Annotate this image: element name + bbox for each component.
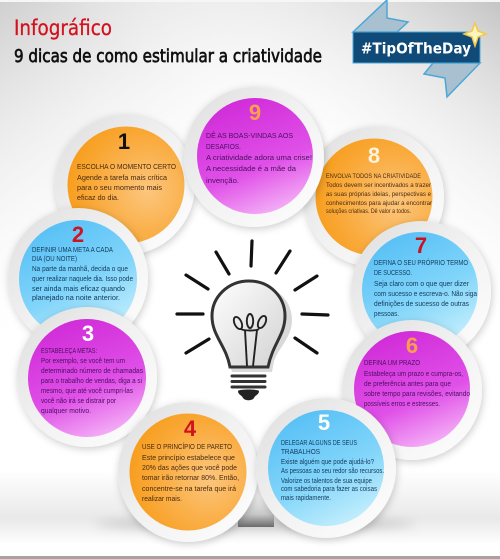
text: tip 6 <box>364 358 470 408</box>
number 8: 8 <box>368 143 380 168</box>
text: tip 2: DEFINIR UMA META A CADA <box>32 245 114 254</box>
text: tip 9: A necessidade é a mãe da <box>206 164 297 173</box>
text: tip 2: ser ainda mais eficaz quando <box>32 284 125 293</box>
text: tip 6: DEFINA UM PRAZO <box>364 358 420 367</box>
number 1: 1 <box>118 129 130 154</box>
panel: tip 9 <box>184 87 324 227</box>
text: tip 5: DELEGAR ALGUNS DE SEUS <box>281 440 357 447</box>
text: tip 9: A criatividade adora uma crise! <box>206 153 312 162</box>
text: tip 7: definições de sucesso de outras <box>374 299 469 308</box>
text: tip 8: conhecimentos para ajudar a encontrar <box>326 200 433 207</box>
text: tip 6: Estabeleça um prazo e cumpra-os, <box>364 369 463 378</box>
text: tip 4: Este princípio estabelece que <box>142 453 235 462</box>
text: tip 2: Na parte da manhã, decida o que <box>32 264 128 273</box>
text: tip 2: DIA (OU NOITE) <box>32 254 77 263</box>
text: tip 5: Valorize os talentos de sua equipe <box>281 478 372 485</box>
text: tip 2: planejado na noite anterior. <box>32 293 120 302</box>
subtitle: 9 dicas de como estimular a criatividade <box>14 46 322 67</box>
number 3: 3 <box>82 321 94 346</box>
text: tip 5: Existe alguém que pode ajudá-lo? <box>281 459 374 466</box>
text: tip 7: com sucesso e escreva-o. Não siga <box>374 289 478 298</box>
text: tip 7: Seja claro com o que quer dizer <box>374 279 469 288</box>
text: tip 6: de preferência antes para que <box>364 379 451 388</box>
icon: sparkle star <box>464 23 486 46</box>
text: tip 9 <box>206 131 312 185</box>
text: tip 3: para o trabalho de vendas, diga a si <box>41 376 142 385</box>
text: tip 3 <box>41 346 143 415</box>
text: tip 9: DESAFIOS. <box>206 142 241 151</box>
text: tip 3: qualquer motivo. <box>41 406 91 415</box>
text: tip 2 <box>32 245 133 302</box>
text: tip 4: realizar mais. <box>142 494 182 503</box>
text: tip 9: DÊ AS BOAS-VINDAS AOS <box>206 131 293 140</box>
text: tip 3: ESTABELEÇA METAS: <box>41 346 97 355</box>
text: tip 1: eficaz do dia. <box>77 193 119 202</box>
panel: tip 1 <box>55 115 195 255</box>
text: tip 4: 20% das ações que você pode <box>142 463 237 472</box>
text: tip 8: Todos devem ser incentivados a trazer <box>326 182 432 189</box>
text: tip 4: concentre-se na tarefa que irá <box>142 484 237 493</box>
number 7: 7 <box>415 233 427 258</box>
number 4: 4 <box>184 416 197 441</box>
text: tip 7: DEFINA O SEU PRÓPRIO TERMO <box>374 258 468 267</box>
ribbon: TipOfTheDay: #TipOfTheDay <box>361 40 471 58</box>
text: tip 7: pessoas. <box>374 309 399 318</box>
text: tip 5: TRABALHOS <box>281 449 320 456</box>
text: tip 1 <box>77 162 176 202</box>
text: tip 7: DE SUCESSO. <box>374 268 412 277</box>
text: tip 5: com sabedoria para fazer as coisas <box>281 486 377 493</box>
text: tip 5 <box>281 440 384 502</box>
panel: tip 6 <box>342 320 482 460</box>
title: Infográfico: Infográfico <box>14 16 112 40</box>
number 2: 2 <box>72 222 84 247</box>
text: tip 1: Agende a tarefa mais crítica <box>77 173 168 182</box>
panel: tip 3 <box>17 307 157 447</box>
ribbon: TipOfTheDay <box>353 0 486 97</box>
text: tip 6: possíveis erros e estresses. <box>364 399 440 408</box>
number 5: 5 <box>318 410 330 435</box>
text: tip 6: sobre tempo para revisões, evitando <box>364 389 470 398</box>
text: tip 1: para o seu momento mais <box>77 183 162 192</box>
text: tip 8 <box>326 173 433 215</box>
text: tip 7 <box>374 258 478 318</box>
number 9: 9 <box>249 100 261 125</box>
panel: tip 4 <box>118 402 258 542</box>
text: tip 2: quer realizar naquele dia. Isso pode <box>32 274 133 283</box>
text: tip 8: as suas próprias ideias, perspectivas e <box>326 191 431 198</box>
text: tip 3: Por exemplo, se você tem um <box>41 356 125 365</box>
text: tip 8: soluções criativas. Dê valor a todos. <box>326 208 411 215</box>
text: tip 4: tomar irão retornar 80%. Então, <box>142 473 239 482</box>
text: tip 3: determinado número de chamadas <box>41 366 143 375</box>
text: tip 3: você não irá se distrair por <box>41 396 116 405</box>
panel: tip 7 <box>351 221 491 361</box>
panel: tip 5 <box>256 398 396 538</box>
text: tip 4: USE O PRINCÍPIO DE PARETO <box>142 442 232 451</box>
number 6: 6 <box>406 333 418 358</box>
text: tip 8: ENVOLVA TODOS NA CRIATIVIDADE <box>326 173 422 180</box>
text: tip 4 <box>142 442 239 503</box>
text: tip 1: ESCOLHA O MOMENTO CERTO <box>77 162 176 171</box>
light bulb with rays <box>177 241 328 400</box>
text: tip 5: mais rapidamente. <box>281 495 331 502</box>
panel: tip 2 <box>8 208 148 348</box>
text: tip 9: invenção. <box>206 176 239 185</box>
panel: tip 8 <box>304 127 444 267</box>
text: tip 5: As pessoas ao seu redor são recursos. <box>281 468 384 475</box>
text: tip 3: mesmo, que até você cumpri-las <box>41 386 133 395</box>
